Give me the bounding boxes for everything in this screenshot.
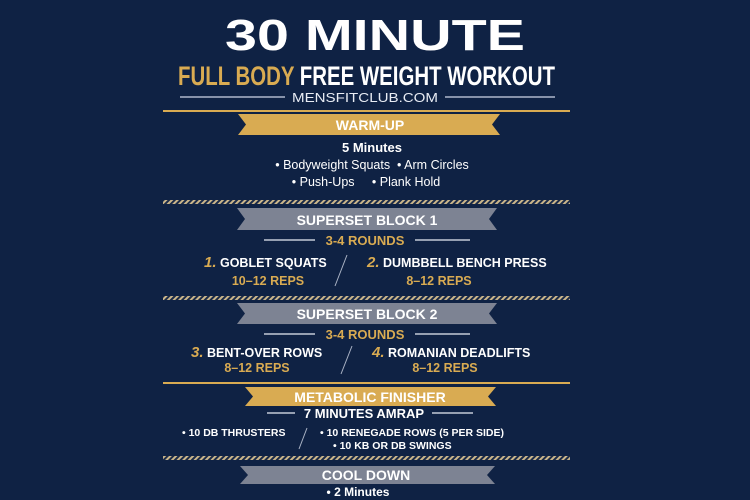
title: 30 MINUTE — [225, 11, 525, 60]
panel: warm-up: • Bodyweight Squats • Arm Circles — [275, 158, 469, 172]
panel: superset block 1: SUPERSET BLOCK 1 — [297, 212, 438, 228]
panel: metabolic finisher — [182, 387, 504, 452]
ribbon: warm-up — [238, 114, 500, 135]
panel: superset block 2: 3. BENT-OVER ROWS — [191, 344, 322, 361]
panel: warm-up — [238, 114, 500, 189]
ribbon: metabolic finisher — [245, 387, 496, 406]
panel: superset block 1: 2. DUMBBELL BENCH PRESS — [366, 254, 547, 271]
ribbon: superset 2 — [237, 303, 497, 324]
panel: warm-up: WARM-UP — [336, 117, 404, 133]
panel: metabolic finisher: METABOLIC FINISHER — [294, 389, 446, 405]
panel: cool down: COOL DOWN — [322, 467, 410, 483]
panel: cool down: • 2 Minutes — [327, 485, 390, 499]
panel: superset block 2 — [191, 303, 530, 375]
panel: superset block 1 — [204, 208, 547, 288]
ribbon: cool down — [240, 466, 495, 484]
panel: metabolic finisher: 7 MINUTES AMRAP — [304, 406, 424, 421]
panel: superset block 2: SUPERSET BLOCK 2 — [297, 306, 438, 322]
panel: warm-up: 5 Minutes — [342, 140, 402, 155]
website line: MENSFITCLUB.COM — [292, 90, 438, 105]
panel: superset block 2: 8–12 REPS — [412, 361, 478, 375]
panel: superset block 1: 10–12 REPS — [232, 274, 304, 288]
panel: superset block 1: 1. GOBLET SQUATS — [204, 254, 327, 271]
ribbon: superset 1 — [237, 208, 497, 230]
panel: metabolic finisher: • 10 KB OR DB SWINGS — [333, 440, 452, 452]
panel: superset block 2: 8–12 REPS — [224, 361, 290, 375]
panel: warm-up: • Push-Ups • Plank Hold — [292, 175, 440, 189]
title — [178, 11, 555, 91]
panel: superset block 2: 3-4 ROUNDS — [326, 327, 405, 342]
panel: superset block 1: 8–12 REPS — [406, 274, 472, 288]
panel: superset block 2: 4. ROMANIAN DEADLIFTS — [371, 344, 530, 361]
panel: cool down — [240, 466, 495, 499]
title: FULL BODY FREE WEIGHT WORKOUT — [178, 61, 555, 91]
panel: metabolic finisher: • 10 RENEGADE ROWS (5 PER SIDE) — [320, 427, 504, 439]
panel: metabolic finisher: • 10 DB THRUSTERS — [182, 427, 285, 439]
panel: superset block 1: 3-4 ROUNDS — [326, 233, 405, 248]
